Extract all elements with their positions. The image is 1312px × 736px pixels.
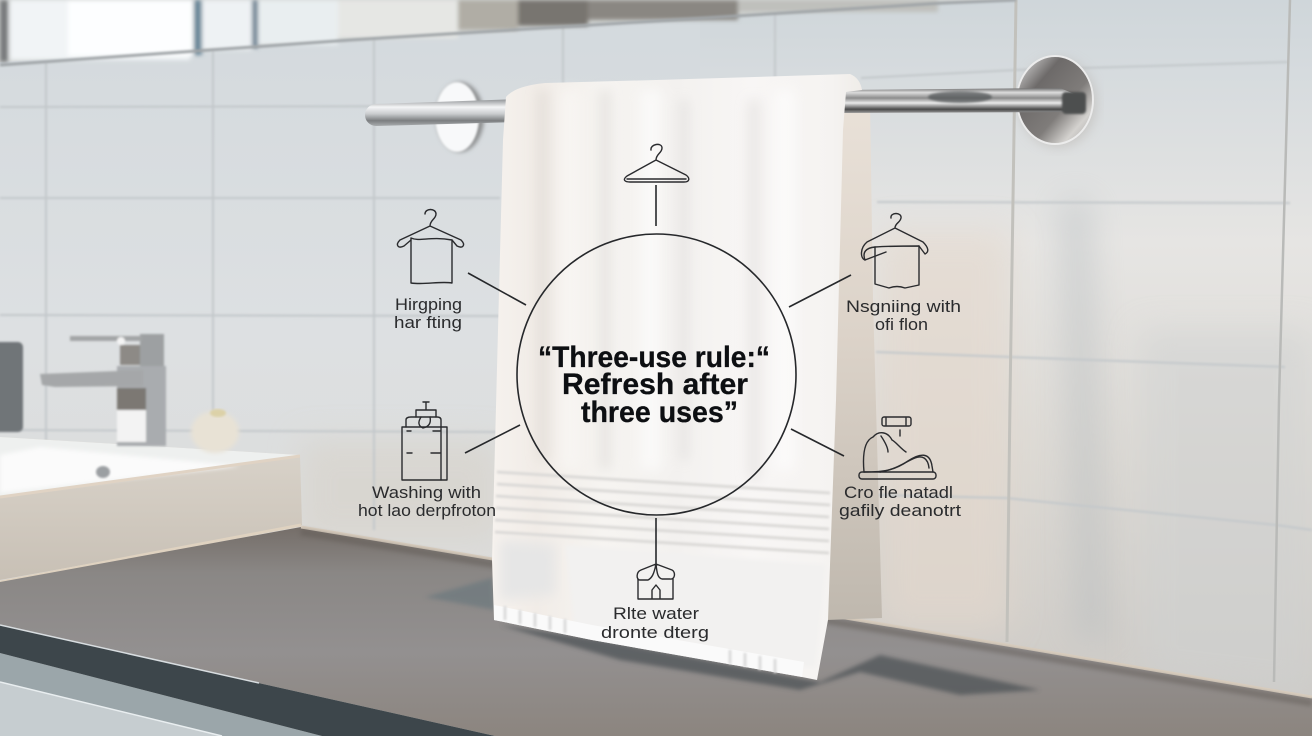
terry bottom panel <box>500 540 556 600</box>
label: ofi flon <box>875 315 928 334</box>
label <box>394 295 462 332</box>
towel back flap <box>826 100 882 620</box>
label: dronte dterg <box>601 623 709 642</box>
sink, soap and faucet <box>0 334 302 582</box>
cabinet front <box>0 653 322 736</box>
item: fold, lower right <box>839 417 961 520</box>
counter front edge <box>0 625 495 736</box>
soap block <box>0 342 23 432</box>
label: Cro fle natadl <box>844 483 953 502</box>
left bracket <box>436 82 484 152</box>
right bracket <box>1020 59 1096 147</box>
label <box>601 604 709 642</box>
item: washing, lower left <box>358 402 496 520</box>
item: washing, upper right <box>846 214 961 334</box>
label <box>846 297 961 334</box>
countertop <box>0 527 1312 736</box>
label: Washing with <box>372 483 481 502</box>
heading: three-use rule <box>538 341 770 429</box>
fold shading <box>538 90 795 480</box>
heading: three-use rule: three uses” <box>581 396 738 429</box>
front panel <box>492 74 862 680</box>
label: Hirgping <box>395 295 462 314</box>
icon: detergent bottle <box>402 402 447 480</box>
woven hem stripes <box>495 472 830 553</box>
label: hot lao derpfroton <box>358 501 496 520</box>
towel bar <box>365 56 1096 152</box>
label: Nsgniing with <box>846 297 961 316</box>
icon: towel on hanger <box>397 210 464 284</box>
label: gafily deanotrt <box>839 501 961 520</box>
label: Rlte water <box>613 604 699 623</box>
faucet <box>40 334 166 446</box>
connector lines <box>465 185 851 565</box>
towel <box>492 74 862 680</box>
rail <box>365 99 520 126</box>
item: rinse, bottom <box>601 564 709 642</box>
label <box>839 483 961 520</box>
icon: towel on hanger <box>861 214 928 288</box>
icon: garment on hanger <box>637 564 674 599</box>
heading: three-use rule: “Three-use rule:“ <box>538 341 770 374</box>
callout circle with rule <box>517 234 796 515</box>
label <box>358 483 496 520</box>
mirror and shelf edge <box>0 0 1016 65</box>
towel shadows <box>425 578 495 610</box>
sponge <box>191 411 239 453</box>
item: hanging towel, upper left <box>394 210 464 332</box>
icon: top hanger <box>624 144 689 182</box>
heading: three-use rule: Refresh after <box>562 368 748 401</box>
icon: iron and folded cloth <box>859 417 936 479</box>
label: har fting <box>394 313 462 332</box>
